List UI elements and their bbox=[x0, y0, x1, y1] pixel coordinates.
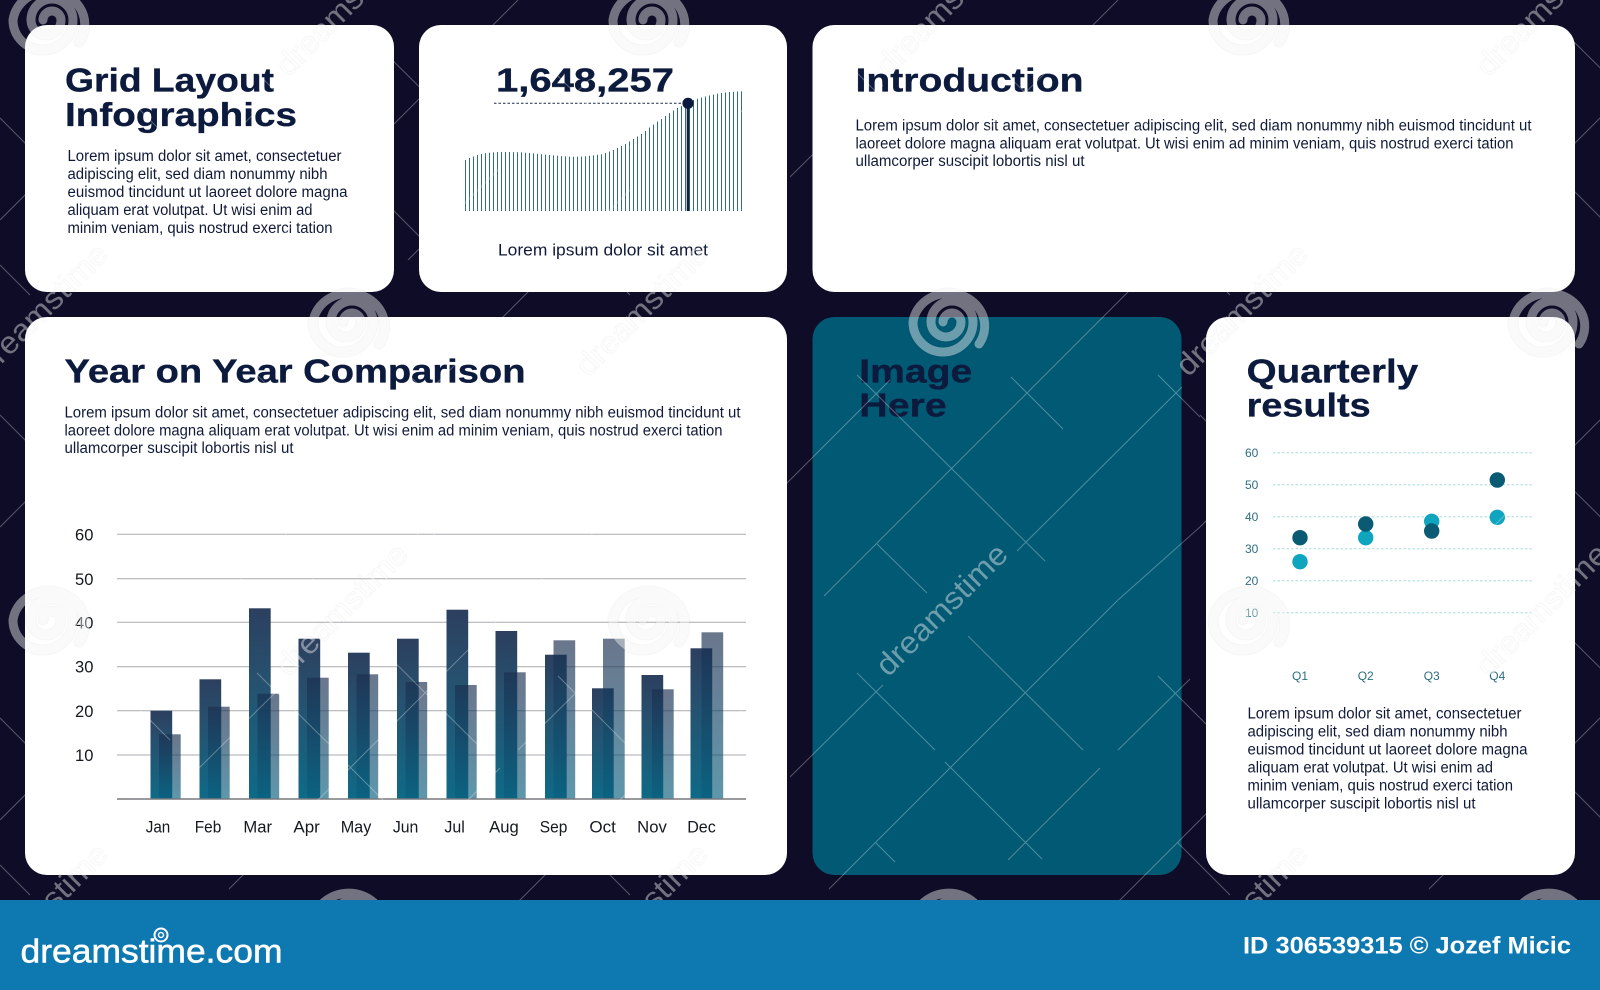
bar sparkline bbox=[466, 91, 742, 211]
month labels: Feb bbox=[195, 818, 221, 836]
dark dots bbox=[1292, 472, 1505, 545]
text block: quarterly body: minim veniam, quis nostrud exerci tation bbox=[1248, 777, 1513, 794]
heading: Image Here: Image bbox=[859, 354, 972, 391]
heading: Grid Layout Infographics bbox=[65, 63, 297, 134]
text block: quarterly body: adipiscing elit, sed diam nonummy nibh bbox=[1248, 723, 1508, 740]
panel: year on year comparison bbox=[25, 317, 787, 875]
text block: grid layout description bbox=[68, 148, 348, 237]
text block: quarterly body: aliquam erat volutpat. Ut wisi enim ad bbox=[1248, 759, 1493, 776]
caption: Lorem ipsum dolor sit amet bbox=[498, 241, 708, 260]
quarter labels: Q3 bbox=[1424, 669, 1440, 683]
panel: big number sparkline bbox=[419, 25, 787, 292]
bar chart: monthly comparison: 20 bbox=[75, 702, 93, 721]
heading: Quarterly results: results bbox=[1247, 388, 1371, 425]
heading: Quarterly results bbox=[1247, 354, 1419, 425]
text block: comparison body: ullamcorper suscipit lobortis nisl ut bbox=[64, 440, 294, 457]
bar chart: monthly comparison: 50 bbox=[75, 570, 93, 589]
month labels: Apr bbox=[293, 818, 320, 836]
dark bars bbox=[150, 608, 712, 799]
month labels bbox=[146, 818, 716, 836]
text block: comparison body: laoreet dolore magna aliquam erat volutpat. Ut wisi enim ad minim veniam, quis nostrud exerci tation bbox=[64, 422, 722, 439]
text block: quarterly body: ullamcorper suscipit lobortis nisl ut bbox=[1248, 795, 1476, 812]
text block: grid layout description: adipiscing elit, sed diam nonummy nibh bbox=[68, 166, 328, 183]
footer bar bbox=[0, 900, 1600, 990]
month labels: Nov bbox=[637, 818, 668, 836]
bar chart: monthly comparison: 10 bbox=[75, 746, 93, 765]
text block: introduction body: Lorem ipsum dolor sit amet, consectetuer adipiscing elit, sed diam nonummy nibh euismod tincidunt ut bbox=[856, 118, 1532, 134]
month labels: May bbox=[341, 818, 372, 836]
dot chart: quarterly: 10 bbox=[1245, 606, 1259, 620]
dot chart: quarterly: 30 bbox=[1245, 542, 1259, 556]
heading: Year on Year Comparison: Year on Year Comparison bbox=[64, 354, 526, 391]
big number: 1,648,257 bbox=[496, 63, 674, 100]
text block: grid layout description: euismod tincidunt ut laoreet dolore magna bbox=[68, 184, 348, 201]
month labels: Jul bbox=[444, 818, 465, 836]
panel: image placeholder bbox=[812, 317, 1182, 875]
heading: Grid Layout Infographics: Grid Layout bbox=[65, 63, 274, 100]
text block: quarterly body: Lorem ipsum dolor sit amet, consectetuer bbox=[1248, 705, 1522, 722]
light dots bbox=[1292, 510, 1505, 569]
quarter labels: Q1 bbox=[1292, 669, 1308, 683]
sparkline marker bbox=[494, 98, 694, 211]
bar chart: monthly comparison bbox=[75, 526, 746, 836]
text block: comparison body bbox=[64, 404, 741, 457]
text block: introduction body bbox=[856, 118, 1532, 170]
quarter labels: Q4 bbox=[1489, 669, 1506, 683]
month labels: Oct bbox=[589, 818, 616, 836]
month labels: Aug bbox=[489, 818, 519, 836]
heading: Quarterly results: Quarterly bbox=[1247, 354, 1419, 391]
text block: introduction body: laoreet dolore magna aliquam erat volutpat. Ut wisi enim ad minim veniam, quis nostrud exerci tation bbox=[856, 136, 1514, 152]
text block: quarterly body bbox=[1248, 705, 1528, 812]
bar chart: monthly comparison: 30 bbox=[75, 658, 93, 677]
quarter labels bbox=[1292, 669, 1506, 683]
bar chart: monthly comparison: 60 bbox=[75, 526, 93, 545]
panel: introduction bbox=[812, 25, 1575, 292]
footer credit: ID 306539315 © Jozef Micic bbox=[1243, 932, 1571, 959]
dot chart: quarterly: 40 bbox=[1245, 510, 1259, 524]
month labels: Sep bbox=[540, 818, 567, 836]
heading: Image Here bbox=[859, 354, 972, 425]
bar chart: monthly comparison: 40 bbox=[75, 614, 93, 633]
quarter labels: Q2 bbox=[1358, 669, 1374, 683]
footer logo: dreamstime.com bbox=[20, 933, 282, 970]
month labels: Jun bbox=[393, 818, 418, 836]
panel: quarterly results bbox=[1206, 317, 1575, 875]
dot chart: quarterly: 50 bbox=[1245, 478, 1259, 492]
panel: grid layout intro bbox=[25, 25, 394, 292]
heading: Grid Layout Infographics: Infographics bbox=[65, 97, 297, 134]
dot chart: quarterly bbox=[1245, 446, 1532, 683]
light bars bbox=[159, 632, 723, 799]
heading: Image Here: Here bbox=[859, 388, 947, 425]
text block: grid layout description: Lorem ipsum dolor sit amet, consectetuer bbox=[68, 148, 342, 165]
text block: quarterly body: euismod tincidunt ut laoreet dolore magna bbox=[1248, 741, 1528, 758]
dot chart: quarterly: 60 bbox=[1245, 446, 1259, 460]
dot chart: quarterly: 20 bbox=[1245, 574, 1259, 588]
text block: introduction body: ullamcorper suscipit lobortis nisl ut bbox=[856, 153, 1085, 170]
month labels: Jan bbox=[146, 818, 170, 836]
text block: comparison body: Lorem ipsum dolor sit amet, consectetuer adipiscing elit, sed diam nonummy nibh euismod tincidunt ut bbox=[64, 404, 741, 421]
month labels: Mar bbox=[243, 818, 273, 836]
text block: grid layout description: minim veniam, quis nostrud exerci tation bbox=[68, 220, 332, 237]
text block: grid layout description: aliquam erat volutpat. Ut wisi enim ad bbox=[68, 202, 312, 219]
heading: Introduction: Introduction bbox=[856, 63, 1084, 100]
month labels: Dec bbox=[687, 818, 716, 836]
